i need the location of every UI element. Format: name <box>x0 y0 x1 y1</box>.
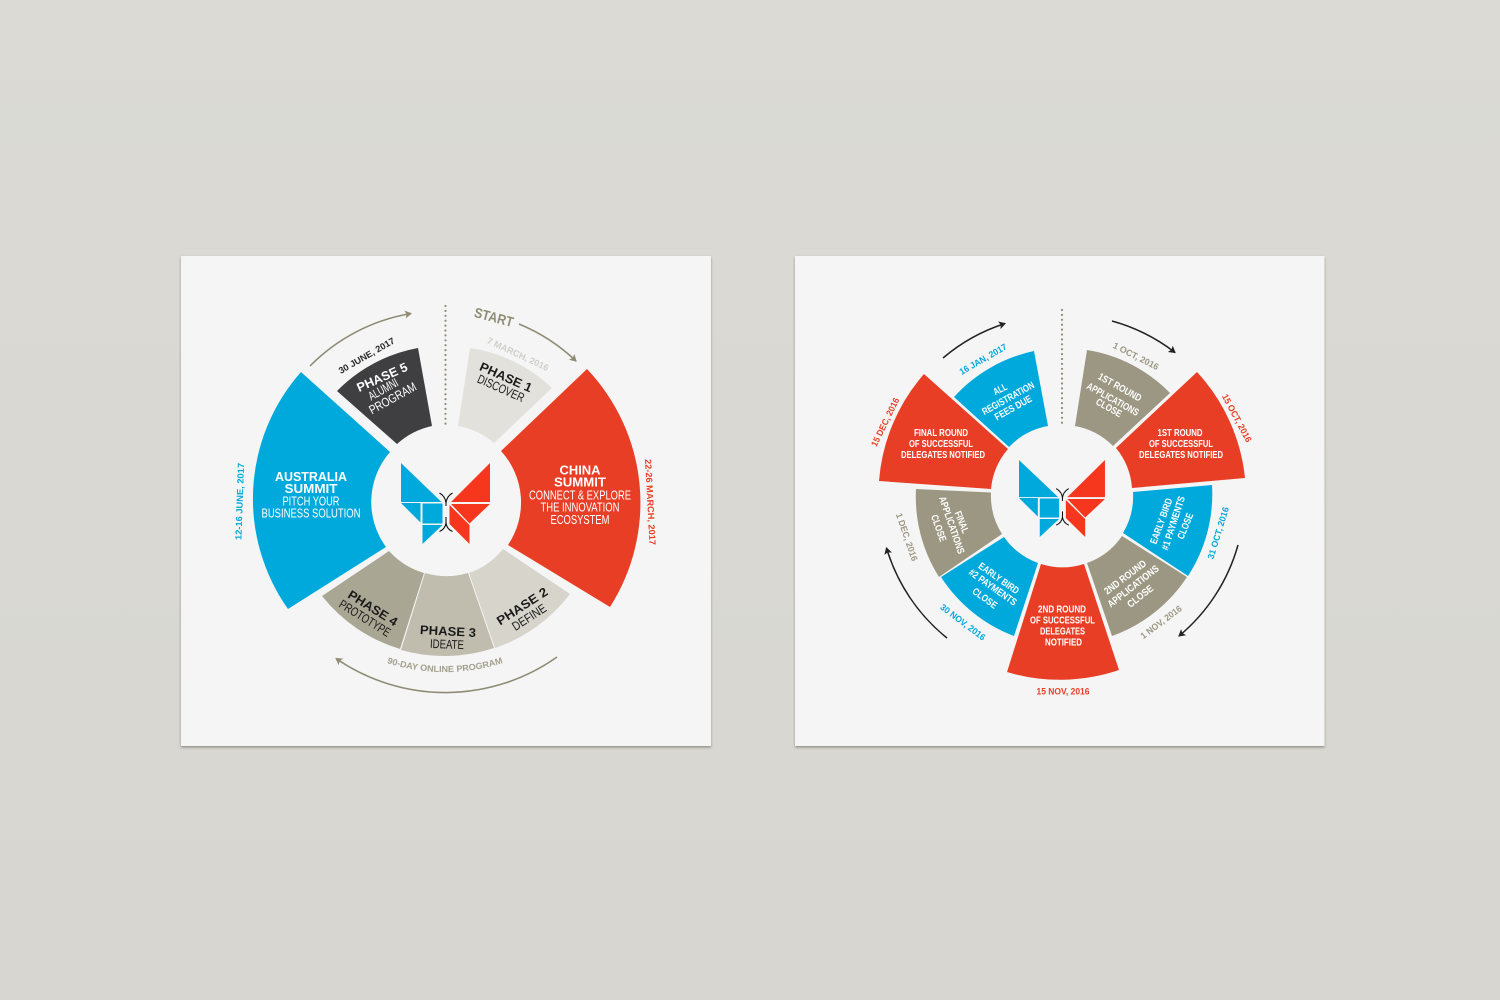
segment: Phase 2 Define: PHASE 2 <box>494 585 550 628</box>
segment: 1st round applications close: 1ST ROUND <box>1096 372 1143 404</box>
segment: 1st round delegates notified: 1ST ROUND <box>1158 428 1202 439</box>
segment: 2nd round delegates notified <box>1007 564 1119 680</box>
date: 1 Oct 2016: 1 OCT, 2016 <box>1111 340 1160 372</box>
segment: 1st round applications close <box>1075 350 1170 446</box>
segment: 2nd round applications close: CLOSE <box>1125 583 1156 610</box>
date: 1 Dec 2016: 1 DEC, 2016 <box>894 512 920 562</box>
date: 30 Nov 2016: 30 NOV, 2016 <box>938 602 987 642</box>
date: 15 Nov 2016: 15 NOV, 2016 <box>1036 686 1090 696</box>
segment: all registration fees due: FEES DUE <box>993 394 1034 423</box>
segment: final applications close <box>916 489 1002 577</box>
arrow: to phase 5 end <box>310 314 411 366</box>
segment: 1st round delegates notified <box>1116 372 1245 488</box>
segment: Phase 2 Define <box>469 549 570 648</box>
segment: Phase 5 Alumni Program: PHASE 5 <box>355 360 410 395</box>
segment: Phase 3 Ideate <box>401 573 494 656</box>
date: 16 Jan 2017: 16 JAN, 2017 <box>958 342 1009 377</box>
date: 12-16 June 2017: 12-16 JUNE, 2017 <box>233 463 246 540</box>
segment: Australia Summit: SUMMIT <box>284 481 338 496</box>
date: 7 March 2016: 7 MARCH, 2016 <box>485 336 550 373</box>
segment: 2nd round applications close <box>1087 536 1187 636</box>
segment: early bird 2 payments close: CLOSE <box>970 586 999 612</box>
segment: Australia Summit <box>253 372 390 609</box>
segment: final applications close: CLOSE <box>928 513 948 544</box>
segment: Phase 1 Discover: PHASE 1 <box>477 360 534 395</box>
icon: butterfly logo <box>1019 460 1105 537</box>
segment: China Summit <box>501 369 640 607</box>
segment: Phase 4 Prototype: PROTOTYPE <box>336 597 393 640</box>
segment: early bird 1 payments close: #1 PAYMENTS <box>1160 495 1188 552</box>
segment: 1st round applications close: CLOSE <box>1094 397 1124 420</box>
segment: Phase 2 Define: DEFINE <box>510 601 549 634</box>
segment: 2nd round delegates notified: DELEGATES <box>1040 626 1085 638</box>
segment: China Summit: SUMMIT <box>554 474 606 490</box>
segment: all registration fees due: ALL <box>992 382 1009 398</box>
segment: Phase 5 Alumni Program: ALUMNI <box>366 376 401 403</box>
date: 1 Nov 2016: 1 NOV, 2016 <box>1139 603 1184 641</box>
segment: all registration fees due: REGISTRATION <box>981 380 1037 418</box>
arrow: from start <box>519 324 576 361</box>
segment: Phase 3 Ideate: IDEATE <box>430 637 464 652</box>
segment: China Summit: ECOSYSTEM <box>550 513 610 527</box>
segment: Phase 4 Prototype <box>322 551 424 649</box>
date: 22-26 March 2017: 22-26 MARCH, 2017 <box>643 459 658 545</box>
arrow: top left <box>943 324 1005 358</box>
segment: 1st round applications close: APPLICATIONS <box>1084 381 1141 419</box>
segment: 2nd round delegates notified: NOTIFIED <box>1045 638 1082 648</box>
segment: 1st round delegates notified: OF SUCCESSFUL <box>1149 439 1213 450</box>
segment: final applications close: FINAL <box>952 510 970 535</box>
segment: 2nd round delegates notified: 2ND ROUND <box>1038 604 1086 616</box>
panel: program wheel card <box>180 256 712 749</box>
segment: Phase 1 Discover: DISCOVER <box>475 372 526 405</box>
segment: Phase 1 Discover <box>458 348 552 443</box>
segment: Australia Summit: PITCH YOUR <box>282 494 340 508</box>
segment: final round delegates notified: OF SUCCESSFUL <box>909 439 973 450</box>
arrow: top right <box>1112 321 1175 352</box>
segment: 2nd round applications close: APPLICATIONS <box>1106 563 1162 610</box>
segment: final applications close: APPLICATIONS <box>936 495 966 556</box>
segment: Phase 5 Alumni Program <box>337 348 432 444</box>
segment: Australia Summit: BUSINESS SOLUTION <box>262 506 360 520</box>
arrow: lower left <box>886 548 947 638</box>
segment: China Summit: THE INNOVATION <box>540 500 620 514</box>
segment: 1st round delegates notified: DELEGATES NOTIFIED <box>1139 450 1223 461</box>
segment: early bird 2 payments close: EARLY BIRD <box>976 561 1021 597</box>
segment: Phase 5 Alumni Program: PROGRAM <box>367 380 419 417</box>
segment: early bird 2 payments close: #2 PAYMENTS <box>966 567 1019 609</box>
segment: all registration fees due <box>954 351 1048 447</box>
segment: early bird 1 payments close <box>1123 485 1212 576</box>
arrow: online program <box>336 657 557 693</box>
label: 90-day online program: 90-DAY ONLINE PROGRAM <box>388 657 502 672</box>
label: start: START <box>473 304 516 330</box>
date: 31 Oct 2016: 31 OCT, 2016 <box>1206 506 1231 560</box>
date: 15 Dec 2016: 15 DEC, 2016 <box>869 396 901 448</box>
segment: Australia Summit: AUSTRALIA <box>275 469 348 484</box>
segment: Phase 3 Ideate: PHASE 3 <box>420 623 476 640</box>
segment: final round delegates notified: DELEGATES NOTIFIED <box>901 450 985 461</box>
segment: 2nd round delegates notified: OF SUCCESSFUL <box>1030 616 1095 626</box>
segment: final round delegates notified: FINAL ROUND <box>914 428 968 439</box>
segment: early bird 2 payments close <box>941 537 1038 636</box>
segment: Phase 4 Prototype: PHASE 4 <box>345 588 400 629</box>
segment: early bird 1 payments close: EARLY BIRD <box>1149 497 1175 546</box>
segment: China Summit: CHINA <box>560 462 601 478</box>
segment: 2nd round applications close: 2ND ROUND <box>1102 558 1149 597</box>
icon: butterfly logo <box>401 463 490 544</box>
segment: China Summit: CONNECT & EXPLORE <box>529 488 631 502</box>
panel: application dates wheel card <box>795 256 1324 746</box>
date: 15 Oct 2016: 15 OCT, 2016 <box>1220 392 1254 444</box>
arrow: lower right <box>1179 545 1238 636</box>
date: 30 June 2017: 30 JUNE, 2017 <box>337 336 396 376</box>
segment: early bird 1 payments close: CLOSE <box>1176 512 1196 541</box>
segment: final round delegates notified <box>879 374 1008 489</box>
